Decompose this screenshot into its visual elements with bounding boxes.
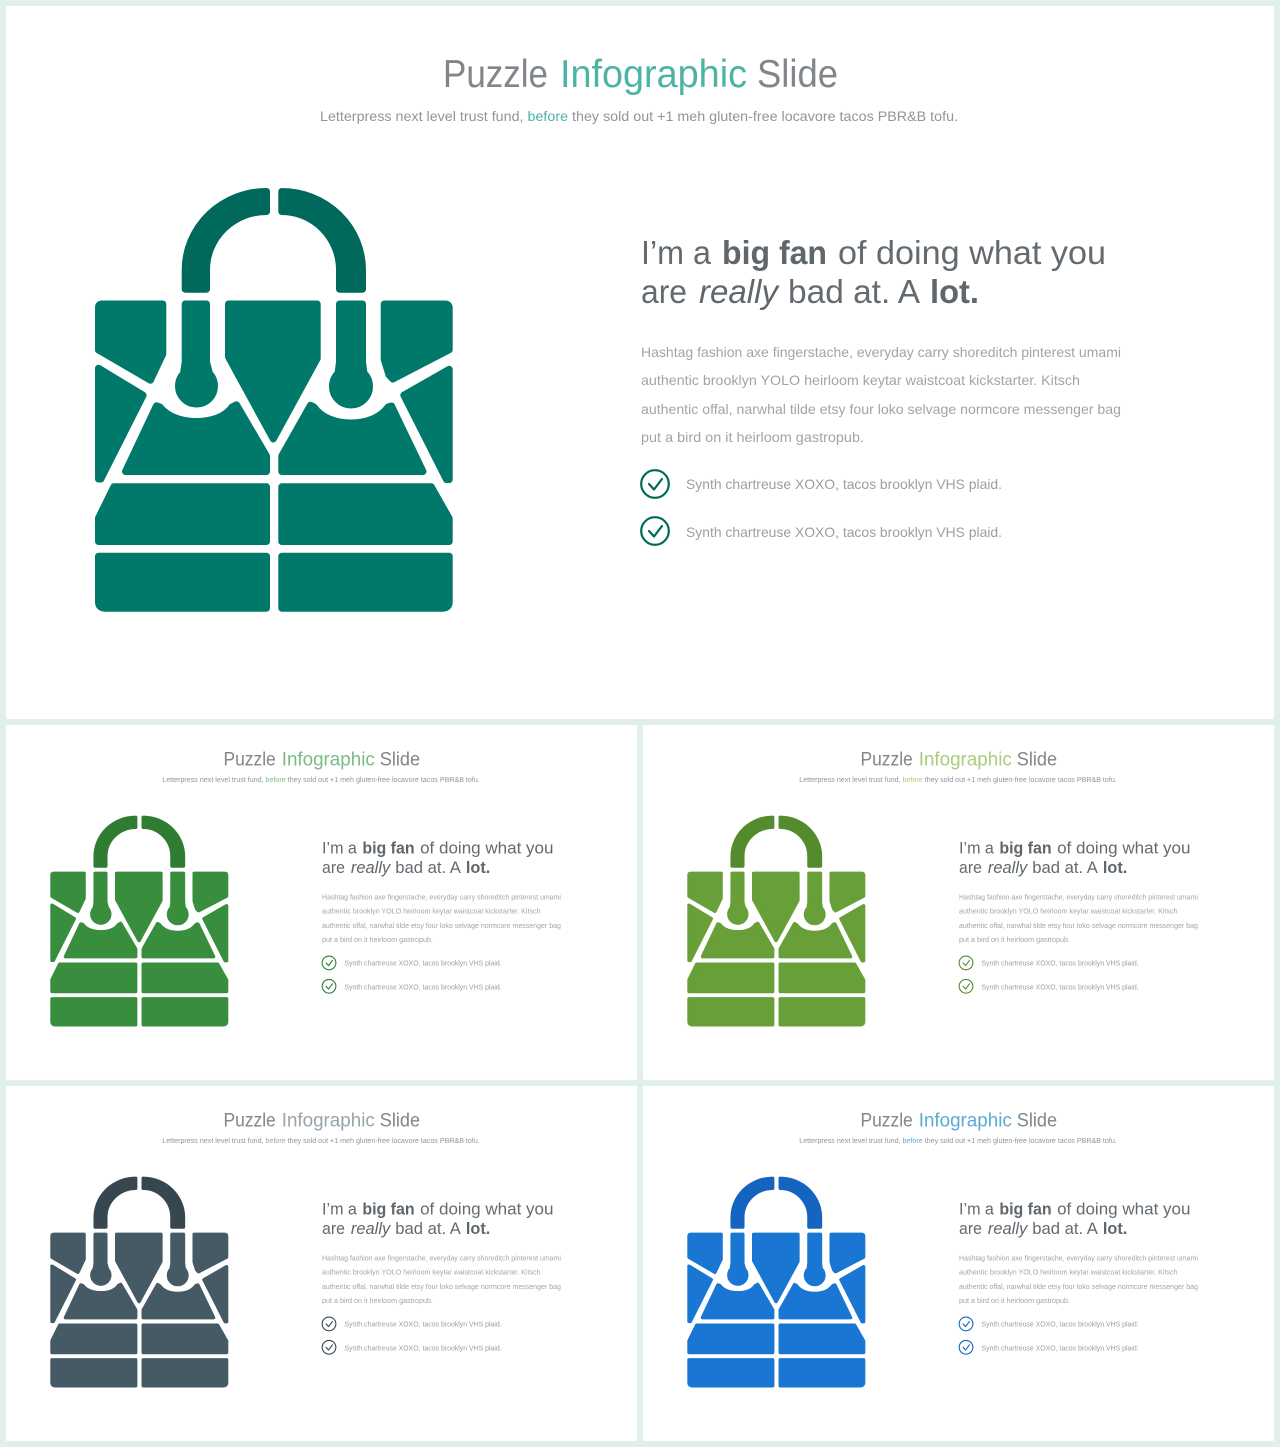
heading: big fan xyxy=(999,1200,1052,1218)
body text: Hashtag fashion axe fingerstache, everyday carry shoreditch pinterest umami xyxy=(959,895,1198,902)
heading: are xyxy=(322,1220,345,1238)
checklist item 1: Synth chartreuse XOXO, tacos brooklyn VHS plaid. xyxy=(981,960,1139,967)
body text: put a bird on it heirloom gastropub. xyxy=(641,429,864,445)
heading: big fan xyxy=(362,1200,415,1218)
checklist item 1: Synth chartreuse XOXO, tacos brooklyn VHS plaid. xyxy=(344,1321,502,1328)
title: Puzzle xyxy=(443,53,548,96)
title: Slide xyxy=(1017,748,1057,770)
heading: really xyxy=(351,859,392,877)
checklist item 1 xyxy=(641,470,1002,498)
subtitle: Letterpress next level trust fund, before they sold out +1 meh gluten-free locavore tacos PBR&B tofu. xyxy=(162,1138,480,1145)
checklist item 1: Synth chartreuse XOXO, tacos brooklyn VHS plaid. xyxy=(981,1321,1139,1328)
checklist item 1: Synth chartreuse XOXO, tacos brooklyn VHS plaid. xyxy=(686,476,1002,492)
heading: I’m a xyxy=(641,234,712,271)
icon: puzzle shopping bag xyxy=(52,1178,227,1386)
panel: main teal slide xyxy=(6,6,1274,719)
title: Slide xyxy=(757,53,838,96)
title: Puzzle xyxy=(860,748,913,770)
body text: put a bird on it heirloom gastropub. xyxy=(322,937,433,944)
checklist item 1 xyxy=(322,1317,502,1331)
heading: I’m a xyxy=(322,839,358,857)
heading: lot. xyxy=(466,1220,490,1238)
heading: lot. xyxy=(1103,859,1127,877)
checklist item 2 xyxy=(959,1340,1139,1354)
heading: of doing what you xyxy=(1057,839,1190,857)
title: Puzzle xyxy=(223,1109,276,1131)
body text: authentic brooklyn YOLO heirloom keytar waistcoat kickstarter. Kitsch xyxy=(322,1270,541,1277)
subtitle: Letterpress next level trust fund, before they sold out +1 meh gluten-free locavore tacos PBR&B tofu. xyxy=(162,777,480,784)
heading: really xyxy=(351,1220,392,1238)
heading xyxy=(641,234,1106,310)
heading: bad at. A xyxy=(395,859,461,877)
checklist item 1 xyxy=(322,956,502,970)
heading: are xyxy=(322,859,345,877)
body text xyxy=(959,895,1198,944)
title: Infographic xyxy=(282,1109,375,1131)
body text: authentic brooklyn YOLO heirloom keytar waistcoat kickstarter. Kitsch xyxy=(959,1270,1178,1277)
heading: of doing what you xyxy=(420,839,553,857)
checklist item 2 xyxy=(641,517,1002,545)
icon: puzzle shopping bag xyxy=(689,817,864,1025)
checklist item 2: Synth chartreuse XOXO, tacos brooklyn VHS plaid. xyxy=(981,984,1139,991)
body text: authentic offal, narwhal tilde etsy four loko selvage normcore messenger bag xyxy=(641,401,1121,417)
body text: authentic brooklyn YOLO heirloom keytar waistcoat kickstarter. Kitsch xyxy=(959,909,1178,916)
heading: of doing what you xyxy=(838,234,1106,271)
body text xyxy=(322,895,561,944)
body text: put a bird on it heirloom gastropub. xyxy=(322,1298,433,1305)
heading: lot. xyxy=(1103,1220,1127,1238)
checklist item 1 xyxy=(959,956,1139,970)
checklist item 1 xyxy=(959,1317,1139,1331)
checklist item 2 xyxy=(959,979,1139,993)
checklist item 1: Synth chartreuse XOXO, tacos brooklyn VHS plaid. xyxy=(344,960,502,967)
title: Slide xyxy=(380,1109,420,1131)
panel: green slide xyxy=(6,725,637,1080)
body text: put a bird on it heirloom gastropub. xyxy=(959,937,1070,944)
heading: bad at. A xyxy=(1032,1220,1098,1238)
title: Slide xyxy=(1017,1109,1057,1131)
body text: authentic brooklyn YOLO heirloom keytar waistcoat kickstarter. Kitsch xyxy=(322,909,541,916)
checklist item 2: Synth chartreuse XOXO, tacos brooklyn VHS plaid. xyxy=(344,1345,502,1352)
heading: I’m a xyxy=(959,1200,995,1218)
checklist item 2: Synth chartreuse XOXO, tacos brooklyn VHS plaid. xyxy=(344,984,502,991)
heading: are xyxy=(641,273,687,310)
title xyxy=(860,1109,1057,1131)
title xyxy=(223,748,420,770)
heading xyxy=(322,839,553,877)
heading: of doing what you xyxy=(420,1200,553,1218)
heading: bad at. A xyxy=(1032,859,1098,877)
heading: big fan xyxy=(999,839,1052,857)
title xyxy=(223,1109,420,1131)
heading xyxy=(959,1200,1190,1238)
panel: lime slide xyxy=(643,725,1274,1080)
body text xyxy=(322,1256,561,1305)
title: Puzzle xyxy=(860,1109,913,1131)
heading: really xyxy=(699,273,781,310)
title xyxy=(860,748,1057,770)
subtitle: Letterpress next level trust fund, before they sold out +1 meh gluten-free locavore tacos PBR&B tofu. xyxy=(799,777,1117,784)
heading: lot. xyxy=(930,273,979,310)
body text: authentic offal, narwhal tilde etsy four loko selvage normcore messenger bag xyxy=(959,923,1198,930)
heading: really xyxy=(988,859,1029,877)
subtitle: Letterpress next level trust fund, before they sold out +1 meh gluten-free locavore tacos PBR&B tofu. xyxy=(320,108,958,124)
panel: slate slide xyxy=(6,1086,637,1441)
title xyxy=(443,53,838,96)
heading: of doing what you xyxy=(1057,1200,1190,1218)
body text xyxy=(641,344,1121,445)
title: Infographic xyxy=(919,1109,1012,1131)
checklist item 2 xyxy=(322,979,502,993)
checklist item 2 xyxy=(322,1340,502,1354)
panel: blue slide xyxy=(643,1086,1274,1441)
body text: authentic brooklyn YOLO heirloom keytar waistcoat kickstarter. Kitsch xyxy=(641,372,1080,388)
heading: big fan xyxy=(722,234,827,271)
heading: I’m a xyxy=(959,839,995,857)
body text: Hashtag fashion axe fingerstache, everyday carry shoreditch pinterest umami xyxy=(322,895,561,902)
heading: I’m a xyxy=(322,1200,358,1218)
title: Puzzle xyxy=(223,748,276,770)
title: Infographic xyxy=(560,53,747,96)
body text: put a bird on it heirloom gastropub. xyxy=(959,1298,1070,1305)
heading: bad at. A xyxy=(395,1220,461,1238)
icon: puzzle shopping bag xyxy=(689,1178,864,1386)
heading xyxy=(959,839,1190,877)
checklist item 2: Synth chartreuse XOXO, tacos brooklyn VHS plaid. xyxy=(981,1345,1139,1352)
body text: authentic offal, narwhal tilde etsy four loko selvage normcore messenger bag xyxy=(322,923,561,930)
heading xyxy=(322,1200,553,1238)
heading: really xyxy=(988,1220,1029,1238)
heading: big fan xyxy=(362,839,415,857)
body text: Hashtag fashion axe fingerstache, everyday carry shoreditch pinterest umami xyxy=(641,344,1121,360)
body text: authentic offal, narwhal tilde etsy four loko selvage normcore messenger bag xyxy=(322,1284,561,1291)
heading: are xyxy=(959,1220,982,1238)
subtitle: Letterpress next level trust fund, before they sold out +1 meh gluten-free locavore tacos PBR&B tofu. xyxy=(799,1138,1117,1145)
body text: authentic offal, narwhal tilde etsy four loko selvage normcore messenger bag xyxy=(959,1284,1198,1291)
body text: Hashtag fashion axe fingerstache, everyday carry shoreditch pinterest umami xyxy=(322,1256,561,1263)
icon: puzzle shopping bag xyxy=(98,192,449,608)
heading: bad at. A xyxy=(788,273,920,310)
heading: are xyxy=(959,859,982,877)
title: Infographic xyxy=(282,748,375,770)
icon: puzzle shopping bag xyxy=(52,817,227,1025)
checklist item 2: Synth chartreuse XOXO, tacos brooklyn VHS plaid. xyxy=(686,524,1002,540)
title: Infographic xyxy=(919,748,1012,770)
body text: Hashtag fashion axe fingerstache, everyday carry shoreditch pinterest umami xyxy=(959,1256,1198,1263)
title: Slide xyxy=(380,748,420,770)
heading: lot. xyxy=(466,859,490,877)
body text xyxy=(959,1256,1198,1305)
